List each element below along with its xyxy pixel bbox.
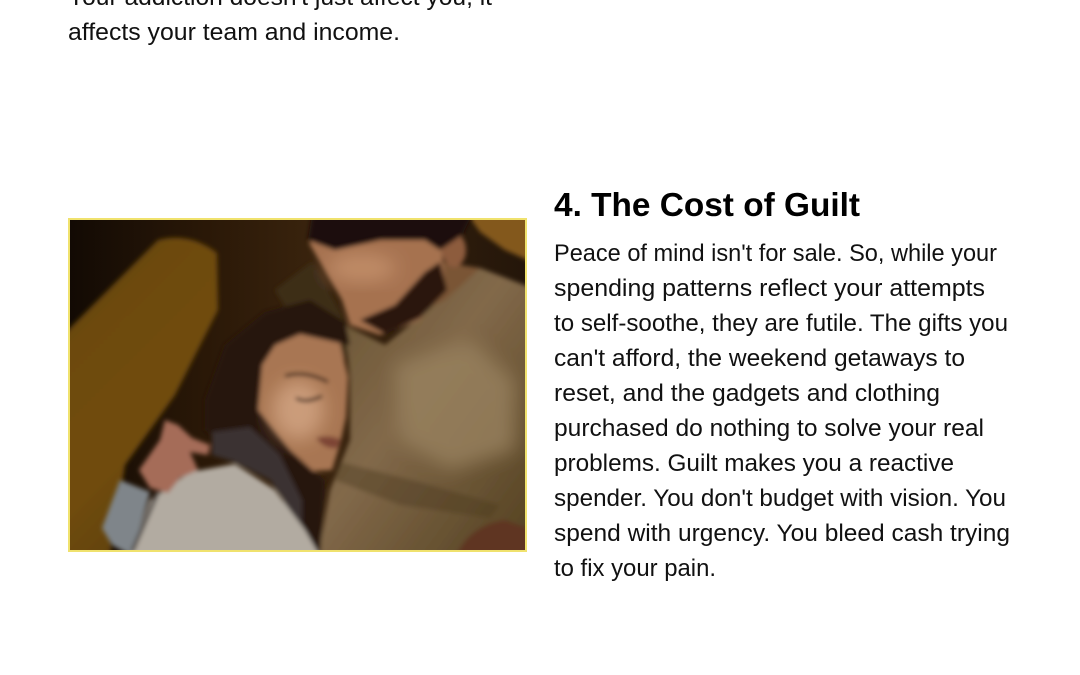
man's beard <box>360 262 447 334</box>
woman's lips <box>316 436 341 448</box>
man's ear <box>442 233 466 267</box>
text block: guilt paragraph: reset, and the gadgets and clothing <box>554 380 940 407</box>
man's hair <box>308 215 472 250</box>
man's far shoulder shadow <box>275 262 350 360</box>
text block: guilt paragraph: purchased do nothing to solve your real <box>554 415 984 442</box>
forehead highlight <box>328 254 396 282</box>
woman's hand <box>139 420 210 493</box>
text block: guilt paragraph: to self-soothe, they are futile. The gifts you <box>554 310 1008 337</box>
scarf <box>212 427 302 525</box>
man's shirt <box>318 268 532 556</box>
text block: intro paragraph ending: affects your team and income. <box>68 19 400 46</box>
text block: guilt paragraph: can't afford, the weekend getaways to <box>554 345 965 372</box>
text block: guilt paragraph: spend with urgency. You bleed cash trying <box>554 520 1010 547</box>
shirt shadow fold <box>335 462 493 515</box>
sweater <box>130 464 320 556</box>
woman's face <box>258 334 348 471</box>
photo: couple embracing on a sofa <box>60 215 532 556</box>
text block: guilt paragraph: spending patterns reflect your attempts <box>554 275 985 302</box>
text block: guilt paragraph: Peace of mind isn't for sale. So, while your <box>554 240 997 267</box>
man's hand, lower right <box>459 520 525 550</box>
text block: intro paragraph ending <box>68 0 492 46</box>
man's face <box>309 226 445 335</box>
man's neck <box>430 260 480 306</box>
text block: guilt paragraph: to fix your pain. <box>554 555 716 582</box>
text block: guilt paragraph: problems. Guilt makes you a reactive <box>554 450 954 477</box>
woman's brow and eye <box>285 374 328 401</box>
heading: 4. The Cost of Guilt: 4. The Cost of Guilt <box>554 186 860 223</box>
text block: guilt paragraph: spender. You don't budget with vision. You <box>554 485 1006 512</box>
sofa corner, top right <box>469 220 525 262</box>
woman's hair <box>205 300 350 556</box>
shirt highlight <box>395 340 515 470</box>
sofa cushion <box>60 238 218 556</box>
cheek highlight <box>272 380 324 440</box>
text block: guilt paragraph <box>554 240 1010 582</box>
sweater seam <box>132 492 158 552</box>
photo border <box>69 219 526 551</box>
sleeve <box>102 480 150 556</box>
